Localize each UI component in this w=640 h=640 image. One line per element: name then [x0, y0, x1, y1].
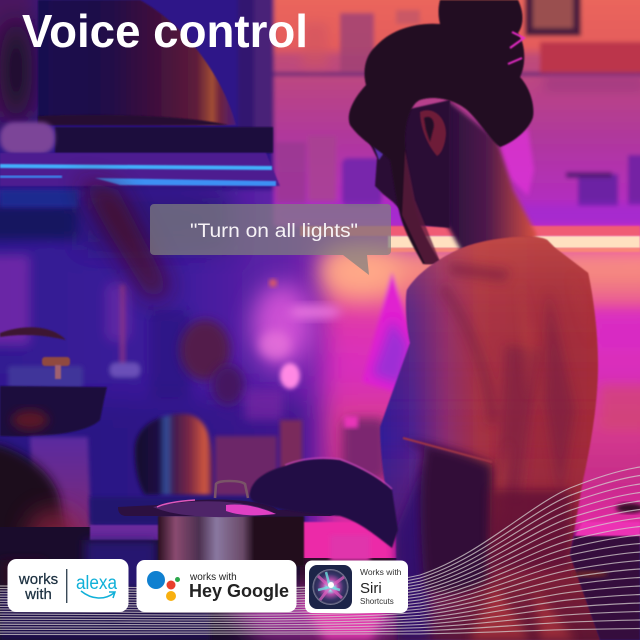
- bottom wall darkening: [0, 400, 310, 530]
- right counter and wall bottom: [570, 503, 640, 640]
- badge: works with alexa: with: [24, 586, 52, 603]
- badge: works with alexa: [8, 559, 128, 612]
- shelf and shelf items: [274, 72, 640, 76]
- badge: works with Siri Shortcuts: Shortcuts: [360, 597, 394, 606]
- left kitchen tools: [105, 282, 131, 342]
- speech bubble: [150, 204, 391, 275]
- hair fringe strands: [402, 150, 441, 264]
- title: Voice control: [22, 5, 308, 57]
- shirt folds: [440, 262, 575, 500]
- speech bubble: "Turn on all lights": [190, 221, 358, 242]
- blurred foreground leaf: [78, 178, 170, 300]
- face: [368, 100, 450, 228]
- counter: [0, 497, 410, 640]
- t-shirt: [380, 237, 600, 640]
- badge: works with Siri Shortcuts: [305, 560, 408, 613]
- pink hair wisps: [498, 128, 534, 196]
- wall triangle reflection: [362, 272, 412, 395]
- cookware on left: [0, 327, 387, 570]
- plant with blossoms: [180, 279, 341, 420]
- decorative wave lines: [0, 467, 640, 635]
- woman: [250, 0, 600, 640]
- sleeve hem and arm: [396, 460, 430, 640]
- badge: works with Siri Shortcuts: Works with: [360, 567, 402, 577]
- pot: [118, 481, 338, 566]
- right wall band: [590, 310, 640, 352]
- forearm and hand: [250, 459, 398, 548]
- badge: works with Hey Google: works with: [189, 572, 237, 583]
- badge: works with Siri Shortcuts: Siri: [360, 580, 382, 597]
- cooker hood: [0, 0, 280, 207]
- neck: [447, 100, 537, 252]
- badge: works with alexa: alexa: [76, 573, 117, 594]
- hair: [349, 0, 533, 264]
- badge: works with alexa: works: [18, 571, 58, 588]
- badge: works with Hey Google: Hey Google: [189, 581, 289, 601]
- lower warm wall: [325, 250, 640, 538]
- ear: [420, 110, 446, 156]
- light strip: [300, 226, 640, 252]
- badge: works with Hey Google: [136, 560, 296, 612]
